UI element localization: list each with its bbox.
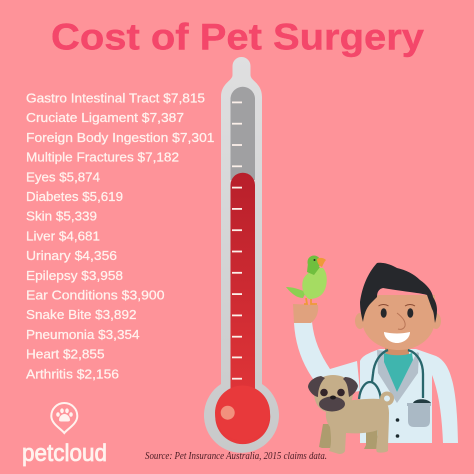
pug body	[326, 399, 389, 454]
eyes	[381, 308, 387, 318]
source note: Source: Pet Insurance Australia, 2015 claims data.	[145, 450, 327, 462]
thermometer mercury	[215, 173, 270, 444]
smile	[384, 332, 410, 343]
logo paw	[56, 408, 73, 422]
face	[362, 295, 435, 350]
hair	[360, 263, 437, 323]
raised arm sleeve	[294, 322, 360, 395]
list of surgery costs	[26, 90, 214, 381]
parrot	[286, 256, 327, 304]
parrot head	[308, 256, 320, 268]
coat	[360, 349, 458, 443]
list of surgery costs: Diabetes $5,619	[26, 189, 123, 204]
pug head	[314, 375, 353, 413]
thermometer glass	[204, 57, 279, 453]
list of surgery costs: Foreign Body Ingestion $7,301	[26, 130, 214, 145]
hand	[293, 304, 318, 323]
list of surgery costs: Arthritis $2,156	[26, 366, 119, 381]
list of surgery costs: Epilepsy $3,958	[26, 268, 123, 283]
nose	[397, 313, 405, 329]
pug far legs	[319, 424, 335, 448]
list of surgery costs: Ear Conditions $3,900	[26, 288, 164, 302]
list of surgery costs: Urinary $4,356	[26, 248, 117, 263]
thermometer ticks	[232, 102, 242, 380]
list of surgery costs: Gastro Intestinal Tract $7,815	[26, 90, 205, 106]
parrot tail	[286, 287, 306, 298]
list of surgery costs: Heart $2,855	[26, 347, 104, 362]
pug ears	[308, 376, 325, 397]
logo pin icon	[51, 403, 77, 433]
list of surgery costs: Skin $5,339	[26, 209, 97, 224]
coat buttons	[396, 418, 399, 422]
thermometer empty tube	[230, 87, 255, 180]
list of surgery costs: Liver $4,681	[26, 228, 100, 243]
parrot beak	[317, 258, 326, 267]
neck	[385, 340, 409, 366]
logo: petcloud	[22, 403, 107, 467]
thermometer	[204, 57, 279, 453]
stethoscope chest piece	[413, 399, 431, 403]
list of surgery costs: Multiple Fractures $7,182	[26, 150, 179, 165]
bulb highlight	[221, 406, 235, 420]
pug tail	[382, 394, 392, 404]
list of surgery costs: Pneumonia $3,354	[26, 327, 140, 342]
pocket	[407, 403, 431, 427]
logo wordmark: petcloud	[22, 440, 107, 467]
title: Cost of Pet Surgery	[51, 16, 424, 58]
brows	[378, 304, 415, 306]
list of surgery costs: Eyes $5,874	[26, 169, 100, 184]
lapels	[377, 350, 419, 403]
ears	[355, 313, 365, 329]
list of surgery costs: Snake Bite $3,892	[26, 307, 136, 322]
parrot body	[302, 268, 327, 299]
stethoscope	[359, 350, 423, 400]
pug muzzle	[319, 396, 345, 412]
list of surgery costs: Cruciate Ligament $7,387	[26, 110, 184, 125]
scrub top	[384, 353, 413, 392]
pug eyes	[320, 389, 328, 396]
parrot feet	[304, 298, 317, 304]
vet character	[293, 263, 458, 443]
pug	[308, 375, 392, 454]
